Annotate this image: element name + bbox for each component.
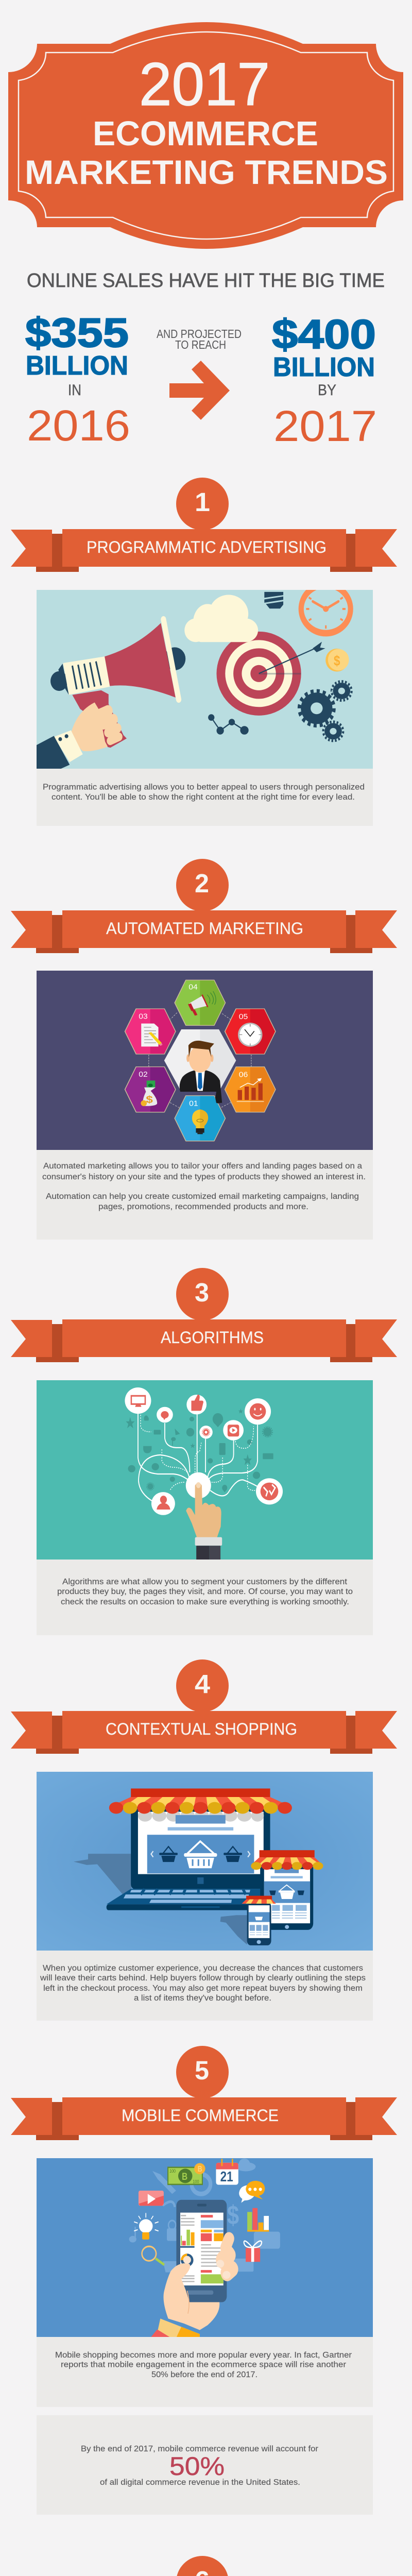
text panel: section 4: will leave their carts behind. Help buyers follow through by clearly outlining the steps: [40, 1974, 366, 1982]
text panel: section 1: Programmatic advertising allows you to better appeal to users through personalized: [43, 783, 365, 791]
illustration: megaphone and target: [37, 590, 373, 769]
callout: mobile commerce revenue: 50%: [169, 2452, 225, 2481]
section 1 ribbon heading: [11, 478, 397, 572]
section 6 ribbon heading: [11, 2556, 397, 2576]
callout: mobile commerce revenue: By the end of 2017, mobile commerce revenue will account for: [81, 2445, 318, 2453]
title plaque: ECOMMERCE: [93, 114, 318, 153]
subtitle: ONLINE SALES HAVE HIT THE BIG TIME: [27, 270, 385, 292]
stat: 2016 sales: [25, 310, 130, 450]
text panel: section 4: a list of items they've bought before.: [134, 1994, 271, 2003]
section 2 ribbon heading: AUTOMATED MARKETING: [106, 919, 303, 938]
text panel: section 3: check the results on occasion to make sure everything is working smoothly.: [61, 1598, 349, 1606]
text panel: section 2: pages, promotions, recommended products and more.: [98, 1202, 308, 1211]
section 4 ribbon heading: [11, 1659, 397, 1754]
illustration: hand holding phone with apps: $: [227, 2200, 239, 2230]
text panel: section 3: [37, 1560, 373, 1635]
text panel: section 3: Algorithms are what allow you to segment your customers by the different: [62, 1578, 348, 1586]
illustration: hand holding phone with apps: [37, 2158, 373, 2337]
section 5 ribbon heading: MOBILE COMMERCE: [122, 2106, 279, 2125]
text panel: section 4: [37, 1951, 373, 2021]
title plaque: [8, 22, 403, 249]
section 1 ribbon heading: PROGRAMMATIC ADVERTISING: [87, 538, 327, 556]
section 2 ribbon heading: [11, 859, 397, 953]
illustration: online shop devices: [37, 1772, 373, 1951]
text panel: section 3: products they buy, the pages they visit, and more. Of course, you may want to: [57, 1587, 353, 1596]
illustration: hand holding phone with apps: B: [198, 2164, 202, 2173]
illustration: hand holding phone with apps: 100: [193, 2179, 199, 2184]
text panel: section 5: reports that mobile engagement in the ecommerce space will rise another: [61, 2361, 346, 2369]
arrow: [169, 361, 230, 420]
illustration: hand holding phone with apps: 100: [169, 2168, 176, 2174]
illustration: algorithm network: [37, 1380, 373, 1560]
text panel: section 2: Automation can help you create customized email marketing campaigns, landing: [46, 1192, 359, 1201]
section 3 ribbon heading: [11, 1268, 397, 1362]
stat: 2017 sales: [272, 311, 377, 450]
section 5 ribbon heading: [11, 2046, 397, 2140]
stat: 2017 sales: BY: [318, 382, 336, 399]
illustration: megaphone and target: $: [334, 653, 340, 669]
title plaque: 2017: [139, 50, 270, 118]
stat: 2017 sales: 2017: [273, 402, 377, 450]
text panel: section 4: left in the checkout process. You may also get more repeat buyers by showing them: [43, 1984, 363, 1993]
stat: 2016 sales: BILLION: [26, 351, 128, 381]
section 4 ribbon heading: 4: [195, 1669, 211, 1699]
text panel: section 5: Mobile shopping becomes more and more popular every year. In fact, Gartner: [55, 2351, 352, 2360]
title plaque: MARKETING TRENDS: [25, 153, 388, 191]
text panel: section 4: When you optimize customer experience, you decrease the chances that customers: [43, 1964, 363, 1973]
projection label: AND PROJECTED: [157, 327, 242, 341]
section 3 ribbon heading: ALGORITHMS: [161, 1328, 264, 1347]
text panel: section 1: content. You'll be able to show the right content at the right time for every lead.: [52, 793, 355, 802]
stat: 2016 sales: IN: [68, 382, 81, 399]
stat: 2017 sales: BILLION: [273, 352, 375, 382]
section 1 ribbon heading: 1: [195, 487, 210, 517]
text panel: section 2: Automated marketing allows you to tailor your offers and landing pages based on a: [43, 1162, 362, 1171]
illustration: hexagon marketing wheel: 01: [189, 1099, 198, 1108]
projection label: [157, 327, 242, 351]
stat: 2016 sales: $355: [25, 310, 129, 355]
illustration: hand holding phone with apps: 21: [220, 2169, 233, 2185]
text panel: section 5: 50% before the end of 2017.: [151, 2370, 258, 2379]
illustration: hexagon marketing wheel: 03: [139, 1012, 148, 1021]
section 3 ribbon heading: 3: [195, 1278, 209, 1307]
text panel: section 2: [37, 1150, 373, 1240]
callout: mobile commerce revenue: [37, 2415, 373, 2515]
illustration: hexagon marketing wheel: 06: [239, 1070, 248, 1079]
text panel: section 1: [37, 769, 373, 826]
section 2 ribbon heading: 2: [195, 869, 209, 898]
illustration: hexagon marketing wheel: 05: [239, 1012, 248, 1021]
stat: 2017 sales: $400: [272, 311, 376, 357]
stat: 2016 sales: 2016: [27, 401, 130, 450]
projection label: TO REACH: [175, 338, 226, 351]
illustration: hand holding phone with apps: B: [182, 2171, 187, 2182]
illustration: hexagon marketing wheel: $: [146, 1094, 153, 1105]
callout: mobile commerce revenue: of all digital commerce revenue in the United States.: [100, 2478, 300, 2487]
section 5 ribbon heading: 5: [195, 2056, 209, 2085]
text panel: section 2: consumer's history on your site and the types of products they showed an interest in.: [42, 1173, 366, 1181]
illustration: hexagon marketing wheel: 02: [139, 1070, 148, 1079]
text panel: section 5: [37, 2337, 373, 2407]
illustration: hexagon marketing wheel: 04: [188, 982, 198, 991]
section 4 ribbon heading: CONTEXTUAL SHOPPING: [106, 1720, 297, 1738]
illustration: hexagon marketing wheel: [37, 971, 373, 1150]
